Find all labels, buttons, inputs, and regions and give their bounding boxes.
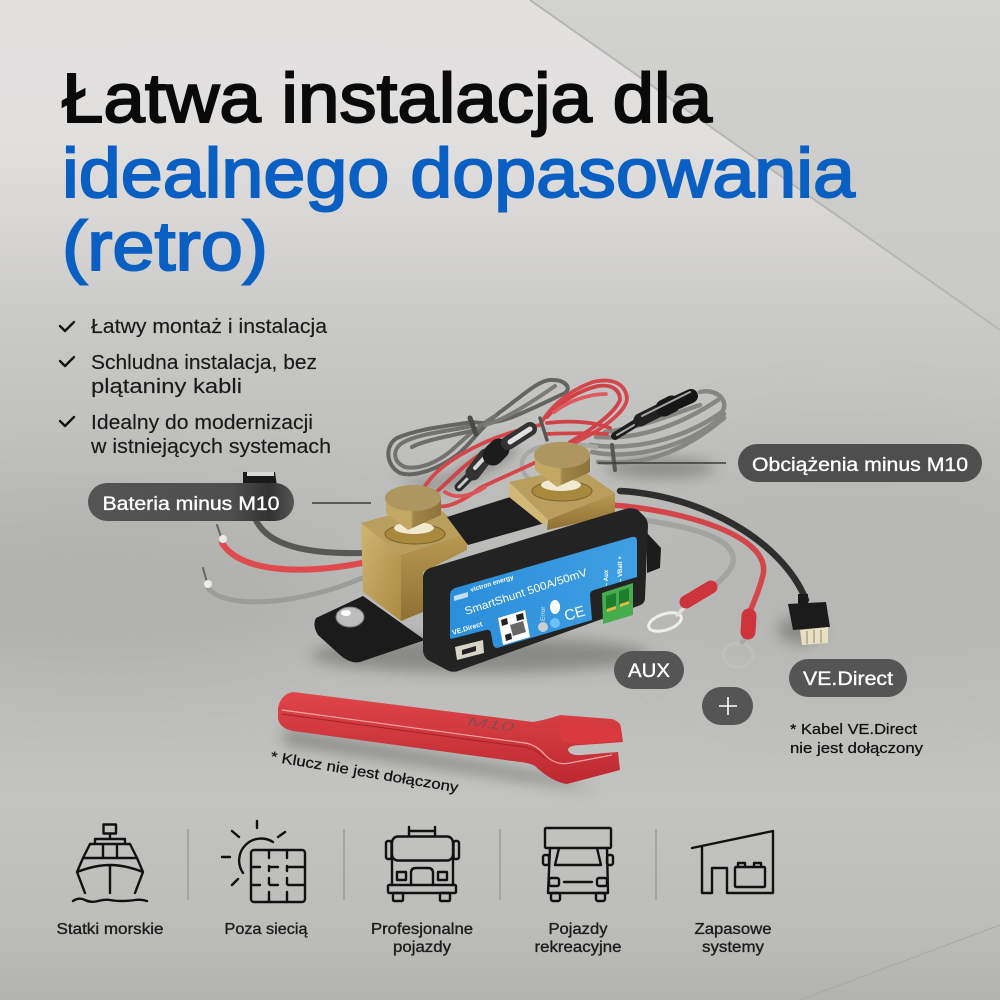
pill: Obciążenia minus M10: Obciążenia minus M10 — [752, 454, 968, 476]
brass block right — [509, 467, 615, 530]
title — [62, 59, 855, 285]
label: Poza siecią: Poza siecią — [224, 921, 308, 938]
icon: solar panel and sun — [222, 821, 305, 902]
QR code — [498, 610, 530, 645]
title: idealnego dopasowania — [62, 134, 855, 212]
rear red cable loop — [424, 381, 627, 506]
leader line: load — [598, 462, 726, 464]
item 3: w istniejących systemach — [90, 436, 331, 458]
pill: Obciążenia minus M10 — [738, 444, 982, 482]
check 1 — [60, 322, 74, 331]
label text: VE.Direct — [452, 621, 484, 637]
label: Pojazdy rekreacyjne — [534, 921, 622, 956]
item 1: Łatwy montaż i instalacja — [91, 316, 328, 338]
pill: Bateria minus M10 — [88, 483, 294, 521]
label: Pojazdy rekreacyjne: Pojazdy — [548, 921, 608, 938]
black housing — [423, 508, 648, 672]
item 2: Schludna instalacja, bez — [91, 352, 317, 374]
wrench size marking: M10 — [467, 714, 516, 735]
item 3: Idealny do modernizacji — [91, 412, 313, 434]
label text: SmartShunt 500A/50mV — [463, 567, 589, 618]
dividers — [188, 829, 656, 900]
VE.Direct port — [455, 640, 484, 660]
leader line: battery — [312, 502, 371, 504]
front right cables — [612, 491, 806, 612]
note: wrench not included: * Klucz nie jest dołączony — [269, 749, 460, 796]
label: Zapasowe systemy: systemy — [702, 939, 764, 956]
item 2: plątaniny kabli — [91, 376, 242, 398]
mounting feet — [314, 533, 661, 662]
icon: ship — [73, 824, 147, 902]
pill: AUX — [614, 651, 684, 689]
item 3 — [90, 412, 331, 458]
small connector behind label — [243, 472, 277, 486]
pill: VE.Direct — [789, 659, 907, 697]
check 3 — [60, 417, 74, 426]
label text: – Aux — [604, 569, 610, 586]
label: Zapasowe systemy: Zapasowe — [694, 921, 772, 938]
shunt bar — [447, 497, 545, 545]
label: Pojazdy rekreacyjne: rekreacyjne — [534, 939, 622, 956]
rear grey cables left loop — [388, 380, 568, 474]
product photo: SmartShunt with cables — [203, 380, 830, 792]
label text — [452, 556, 624, 637]
pill: plus — [702, 687, 753, 725]
label: Profesjonalne pojazdy: Profesjonalne — [371, 921, 473, 938]
note: VE.Direct cable not included: nie jest dołączony — [790, 741, 924, 757]
title: Łatwa instalacja dla — [62, 59, 712, 137]
rear grey cables right bundle — [522, 391, 724, 482]
pill: Bateria minus M10: Bateria minus M10 — [102, 493, 280, 515]
feature checklist — [60, 316, 331, 458]
label text: CE — [562, 603, 587, 625]
pill: VE.Direct: VE.Direct — [803, 668, 894, 690]
label text: – VBatt + — [618, 556, 624, 582]
left cables — [203, 486, 362, 602]
shadows — [283, 440, 822, 792]
brass block left — [361, 503, 467, 621]
label: Profesjonalne pojazdy: pojazdy — [393, 939, 451, 956]
label text: Error — [540, 606, 547, 621]
label: Zapasowe systemy — [694, 921, 772, 956]
green terminal — [602, 583, 633, 624]
pill: AUX: AUX — [628, 660, 670, 682]
title: (retro) — [62, 207, 268, 285]
bolt left — [385, 485, 445, 544]
label text: victron energy — [470, 574, 515, 594]
label: Profesjonalne pojazdy — [371, 921, 473, 956]
bolt right — [532, 442, 592, 501]
wrench — [278, 692, 623, 784]
blue label — [450, 537, 637, 648]
label: Statki morskie: Statki morskie — [56, 921, 164, 938]
icon: recreational vehicle — [543, 828, 613, 901]
note: VE.Direct cable not included: * Kabel VE.Direct — [790, 722, 917, 738]
VE.Direct plug — [788, 594, 830, 645]
check 2 — [60, 357, 74, 366]
item 2 — [91, 352, 317, 398]
fuse holders — [459, 392, 691, 487]
icon: garage with battery — [692, 831, 773, 893]
crimp terminals — [646, 587, 753, 667]
icon: professional truck — [386, 827, 459, 901]
note: VE.Direct cable not included — [790, 722, 924, 757]
